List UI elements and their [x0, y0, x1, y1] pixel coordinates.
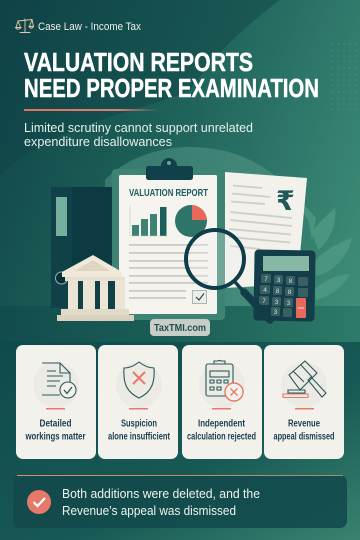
calculator: 7 [264, 276, 268, 283]
header label [16, 19, 141, 33]
icon: shield with cross [124, 362, 154, 398]
subtitle [24, 120, 253, 149]
calculator: 3 [275, 299, 279, 306]
subtitle: expenditure disallowances [24, 134, 172, 149]
calculator: 3 [277, 277, 281, 284]
checkbox [192, 290, 206, 304]
icon: scales [16, 19, 34, 32]
plant leaves [300, 200, 352, 300]
calculator: 4 [263, 287, 267, 294]
icon: calculator clipboard [206, 360, 243, 401]
calculator: 8 [289, 278, 293, 285]
binder [51, 187, 113, 308]
card: revenue appeal [264, 345, 344, 459]
calculator: 3 [287, 300, 291, 307]
bar chart [130, 205, 168, 236]
watermark: TaxTMI.com [154, 322, 206, 334]
building [57, 255, 134, 321]
conclusion bar: Both additions were deleted, and the [62, 486, 260, 501]
report title: VALUATION REPORT [129, 188, 208, 199]
conclusion bar: Revenue’s appeal was dismissed [62, 503, 236, 518]
report text lines [129, 244, 208, 299]
card: suspicion [98, 345, 178, 459]
calculator: 8 [276, 288, 280, 295]
card: independent calculation: Independent [198, 418, 245, 430]
header label: Case Law - Income Tax [38, 21, 141, 33]
card: revenue appeal: Revenue [288, 418, 320, 430]
card: detailed workings: Detailed [40, 418, 72, 430]
title [24, 49, 319, 103]
conclusion bar [13, 475, 347, 528]
card: detailed workings [16, 345, 96, 459]
icon: gavel [283, 361, 326, 398]
subtitle: Limited scrutiny cannot support unrelated [24, 120, 253, 135]
magnifying glass [186, 230, 270, 320]
title: VALUATION REPORTS [24, 49, 253, 77]
card: suspicion: alone insufficient [108, 430, 170, 442]
card: suspicion: Suspicion [121, 418, 157, 430]
calculator: 7 [262, 298, 266, 305]
icon: rupee: ₹ [276, 186, 295, 217]
icon: check circle [27, 490, 51, 514]
clipboard [112, 158, 225, 320]
card: independent calculation: calculation rejected [187, 430, 256, 442]
document with rupee [225, 172, 307, 288]
card: revenue appeal: appeal dismissed [274, 430, 334, 442]
calculator: 8 [288, 289, 292, 296]
illustration [51, 158, 316, 336]
calculator: 3 [274, 309, 278, 316]
watermark [150, 319, 210, 336]
pie chart [175, 205, 207, 237]
icon: document check [42, 363, 76, 398]
card: independent calculation [182, 345, 262, 459]
card: detailed workings: workings matter [25, 430, 86, 442]
calculator [253, 249, 316, 322]
